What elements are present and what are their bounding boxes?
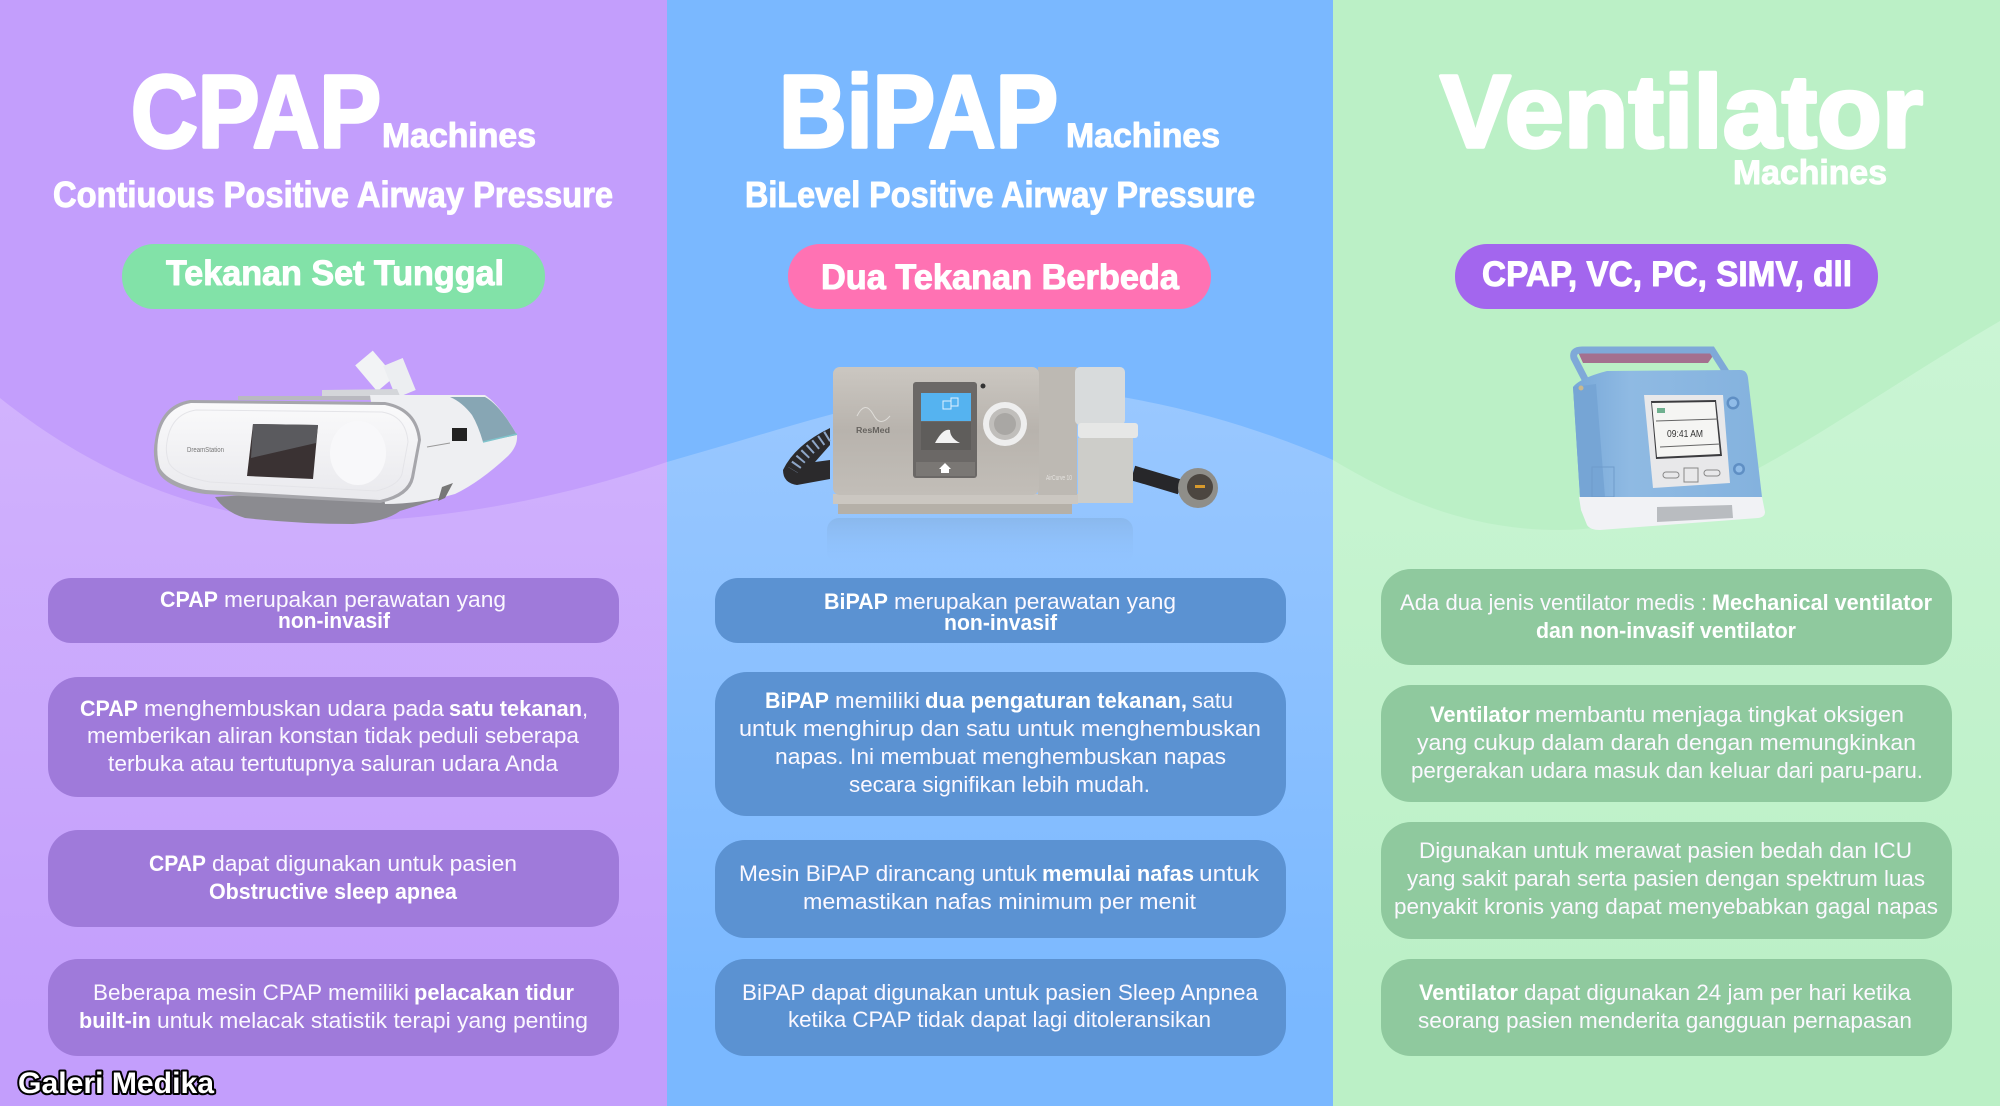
card: sleep apnea: BiPAP dapat digunakan untuk pasien Sleep Anpnea — [742, 980, 1259, 1005]
card: ventilator types — [1381, 569, 1952, 665]
pill: single pressure: Tekanan Set Tunggal — [166, 254, 504, 293]
card: start breaths: memastikan nafas minimum per menit — [803, 889, 1196, 914]
card: surgery and ICU — [1381, 822, 1952, 939]
subtitle: BiPAP: BiLevel Positive Airway Pressure — [745, 174, 1255, 215]
heading: CPAP Machines — [131, 54, 536, 169]
card: non-invasive: non-invasif — [278, 608, 391, 633]
card: 24 hours: seorang pasien menderita gangguan pernapasan — [1418, 1008, 1912, 1033]
panel: BiPAP — [667, 0, 1333, 1106]
heading: Ventilator Machines: Ventilator — [1440, 54, 1923, 169]
card: oxygen level: Ventilator — [1430, 702, 1530, 727]
pill: ventilator modes: CPAP, VC, PC, SIMV, dll — [1482, 255, 1852, 294]
card: sleep tracking: Beberapa mesin CPAP memiliki — [93, 980, 409, 1005]
card: start breaths — [715, 840, 1286, 938]
card: ventilator types: dan non-invasif ventilator — [1536, 618, 1796, 643]
icon: BiPAP machine — [783, 367, 1218, 564]
heading: BiPAP Machines — [779, 54, 1220, 169]
card: sleep tracking: pelacakan tidur — [414, 980, 574, 1005]
card: single pressure description — [48, 677, 619, 797]
card: single pressure description: satu tekanan — [449, 696, 582, 721]
pill: ventilator modes — [1455, 244, 1878, 309]
heading: Ventilator Machines: Machines — [1733, 154, 1887, 192]
card: surgery and ICU: yang sakit parah serta pasien dengan spektrum luas — [1407, 866, 1925, 891]
card: non-invasive: non-invasif — [944, 610, 1058, 635]
card: ventilator types: Mechanical ventilator — [1712, 590, 1932, 615]
icon: CPAP machine — [154, 358, 517, 524]
heading: BiPAP Machines: Machines — [1066, 117, 1220, 155]
card: single pressure description: CPAP — [80, 696, 138, 721]
card: ventilator types: Ada dua jenis ventilator medis : — [1400, 590, 1707, 615]
card: non-invasive — [715, 578, 1286, 643]
card: oxygen level: membantu menjaga tingkat oksigen — [1535, 702, 1904, 727]
card: two pressure settings: napas. Ini membuat menghembuskan napas — [775, 744, 1226, 769]
card: two pressure settings: dua pengaturan tekanan, — [925, 688, 1187, 713]
card: non-invasive: CPAP — [160, 587, 218, 612]
pill: single pressure — [122, 244, 545, 309]
card: obstructive sleep apnea: CPAP — [149, 851, 206, 876]
card: oxygen level: yang cukup dalam darah dengan memungkinkan — [1417, 730, 1916, 755]
card: oxygen level: pergerakan udara masuk dan keluar dari paru-paru. — [1411, 758, 1923, 783]
heading: BiPAP Machines: BiPAP — [779, 54, 1058, 169]
card: start breaths: memulai nafas — [1042, 861, 1194, 886]
card: two pressure settings: untuk menghirup dan satu untuk menghembuskan — [739, 716, 1261, 741]
heading: CPAP Machines: Machines — [382, 117, 536, 155]
card: obstructive sleep apnea — [48, 830, 619, 927]
card: non-invasive: BiPAP — [824, 589, 888, 614]
card: two pressure settings: BiPAP — [765, 688, 829, 713]
card: surgery and ICU: Digunakan untuk merawat pasien bedah dan ICU — [1419, 838, 1912, 863]
icon: CPAP machine: DreamStation — [187, 447, 224, 454]
card: obstructive sleep apnea: Obstructive sleep apnea — [209, 879, 458, 904]
card: oxygen level — [1381, 685, 1952, 802]
heading: CPAP Machines: CPAP — [131, 54, 381, 169]
card: sleep tracking — [48, 959, 619, 1056]
card: single pressure description: terbuka atau tertutupnya saluran udara Anda — [108, 751, 559, 776]
card: sleep apnea: ketika CPAP tidak dapat lagi ditoleransikan — [788, 1007, 1211, 1032]
card: non-invasive — [48, 578, 619, 643]
pill: two pressures: Dua Tekanan Berbeda — [821, 258, 1180, 297]
card: two pressure settings: satu — [1192, 688, 1233, 713]
panel: CPAP — [0, 0, 667, 1106]
card: 24 hours: dapat digunakan 24 jam per hari ketika — [1524, 980, 1912, 1005]
card: two pressure settings: memiliki — [835, 688, 920, 713]
card: single pressure description: , — [582, 696, 588, 721]
card: sleep tracking: untuk melacak statistik terapi yang penting — [157, 1008, 588, 1033]
card: 24 hours: Ventilator — [1419, 980, 1518, 1005]
card: sleep tracking: built-in — [79, 1008, 151, 1033]
card: two pressure settings: secara signifikan lebih mudah. — [849, 772, 1150, 797]
card: single pressure description: memberikan aliran konstan tidak peduli seberapa — [87, 723, 580, 748]
card: surgery and ICU: penyakit kronis yang dapat menyebabkan gagal napas — [1394, 894, 1938, 919]
subtitle: CPAP: Contiuous Positive Airway Pressure — [53, 174, 613, 215]
icon: ventilator machine — [1573, 350, 1765, 530]
card: start breaths: Mesin BiPAP dirancang untuk — [739, 861, 1038, 886]
card: sleep apnea — [715, 959, 1286, 1056]
watermark: Galeri Medika: Galeri Medika — [18, 1067, 214, 1100]
card: two pressure settings — [715, 672, 1286, 816]
card: non-invasive: merupakan perawatan yang — [894, 589, 1176, 614]
icon: BiPAP machine: AirCurve 10 — [1046, 475, 1072, 482]
icon: ventilator machine: 09:41 AM — [1667, 429, 1703, 440]
icon: BiPAP machine: ResMed — [856, 426, 890, 435]
card: 24 hours — [1381, 959, 1952, 1056]
pill: two pressures — [788, 244, 1211, 309]
card: start breaths: untuk — [1199, 861, 1260, 886]
card: single pressure description: menghembuskan udara pada — [144, 696, 445, 721]
card: non-invasive: merupakan perawatan yang — [224, 587, 506, 612]
panel: Ventilator — [1333, 0, 2000, 1106]
card: obstructive sleep apnea: dapat digunakan untuk pasien — [212, 851, 517, 876]
